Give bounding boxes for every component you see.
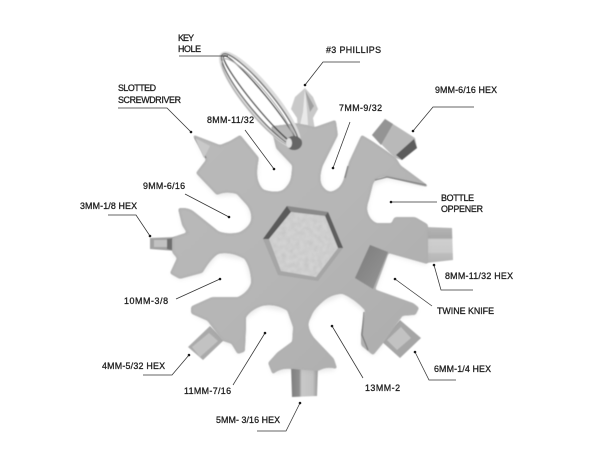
label: 9mm-6/16: 9MM-6/16: [143, 181, 185, 191]
hexagon recess: [263, 206, 343, 281]
blade edge highlights: [195, 138, 426, 350]
label: 8mm-11/32 hex: 8MM-11/32 HEX: [445, 271, 513, 281]
label: key hole: [178, 33, 228, 56]
label: 11mm-7/16: 11MM-7/16: [184, 386, 231, 396]
label: 6mm-1/4 hex: 6MM-1/4 HEX: [434, 364, 491, 374]
label: twine knife: TWINE KNIFE: [437, 306, 494, 316]
label: 9mm-6/16 hex: 9MM-6/16 HEX: [435, 85, 497, 95]
label: key hole: KEY: [178, 33, 194, 43]
label: 3mm-1/8 hex: [80, 201, 151, 237]
label: bottle opener: [390, 193, 483, 214]
label: 9mm-6/16: [143, 181, 230, 218]
bit: 8mm: [425, 227, 453, 263]
bit: 9mm: [372, 119, 417, 160]
label: #3 phillips: [304, 45, 381, 86]
label: 13mm-2: [331, 325, 400, 393]
key ring: [212, 46, 308, 154]
key hole: [286, 136, 302, 150]
bit: 6mm: [380, 320, 421, 358]
phillips bit: [291, 88, 318, 130]
label: 5mm- 3/16 hex: [216, 402, 301, 431]
label: twine knife: [394, 278, 494, 316]
label: slotted screwdriver: [118, 83, 192, 133]
label: 9mm-6/16 hex: [412, 85, 497, 132]
label: 6mm-1/4 hex: [414, 351, 491, 380]
bit: 4mm: [188, 326, 224, 360]
label: 10mm-3/8: [124, 278, 221, 306]
label: 8mm-11/32 hex: [433, 264, 513, 290]
label: bottle opener: OPPENER: [441, 204, 483, 214]
label: 5mm- 3/16 hex: 5MM- 3/16 HEX: [216, 415, 280, 425]
label: key hole: HOLE: [178, 44, 201, 54]
label: bottle opener: BOTTLE: [441, 193, 474, 203]
label: 3mm-1/8 hex: 3MM-1/8 HEX: [80, 201, 137, 211]
label: 7mm-9/32: 7MM-9/32: [339, 103, 382, 113]
label: 13mm-2: 13MM-2: [365, 383, 400, 393]
label: slotted screwdriver: SLOTTED: [118, 83, 156, 93]
label: #3 phillips: #3 PHILLIPS: [326, 45, 381, 55]
label: 4mm-5/32 hex: [102, 354, 190, 375]
metal body shadow: [172, 124, 427, 374]
bit: 5mm: [291, 365, 318, 397]
label: slotted screwdriver: SCREWDRIVER: [118, 95, 181, 105]
twine knife slot: [355, 245, 388, 289]
hex bits: [150, 119, 453, 397]
label: 8mm-11/32: 8MM-11/32: [207, 115, 254, 125]
body details: [195, 138, 426, 350]
label: 7mm-9/32: [332, 103, 382, 169]
snowflake metal body: [171, 121, 427, 373]
label: 8mm-11/32: [207, 115, 275, 170]
label: 10mm-3/8: 10MM-3/8: [124, 296, 168, 306]
label: 11mm-7/16: [184, 332, 266, 396]
label: 4mm-5/32 hex: 4MM-5/32 HEX: [102, 361, 165, 371]
bit: 3mm: [150, 237, 176, 251]
